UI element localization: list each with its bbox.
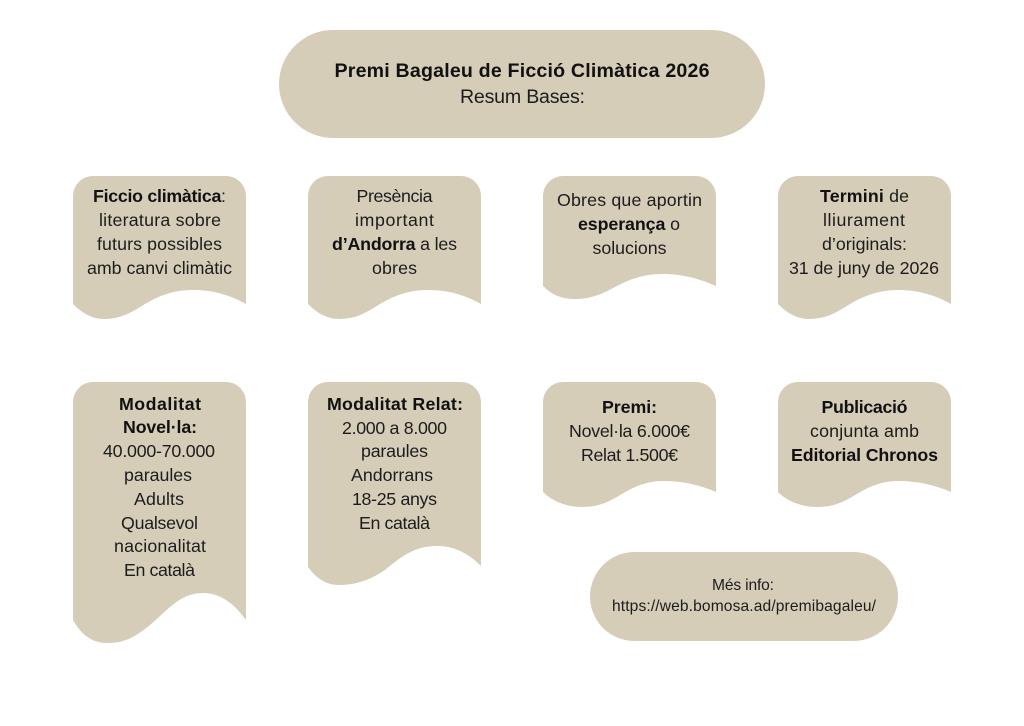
text: prize [569,397,690,465]
panel: publication [778,382,951,507]
text: novel category: Novel·la: [123,417,197,437]
text: more info [612,577,877,615]
text: publication: conjunta amb [810,421,919,441]
text: publication: Publicació [822,397,908,417]
text: short story category: Modalitat Relat: [327,394,463,414]
text: short story category [327,394,463,533]
panel: Andorra presence [308,176,481,319]
text: deadline: Termini de [820,186,909,206]
text: Andorra presence: important [355,210,434,230]
text: publication: Editorial Chronos [791,445,938,465]
panel: prize [543,382,716,507]
text: deadline: d’originals: [822,234,907,254]
text: Andorra presence: obres [372,258,417,278]
subtitle: Resum Bases: [460,86,585,108]
text: hope or solutions: esperança o [578,214,680,234]
text: novel category: nacionalitat [114,536,206,556]
text: deadline [789,186,939,278]
text: short story category: 2.000 a 8.000 [342,418,447,438]
panel: short story category [308,382,481,585]
text: climate fiction definition: amb canvi climàtic [87,258,232,278]
text: climate fiction definition: Ficcio climàtica: [93,186,226,206]
text: prize: Relat 1.500€ [581,445,678,465]
text: novel category: Adults [134,489,184,509]
title: Premi Bagaleu de Ficció Climàtica 2026 [334,60,710,82]
text: novel category: Modalitat [119,394,201,414]
text: novel category [103,394,215,580]
text: short story category: paraules [361,441,428,461]
text: deadline: 31 de juny de 2026 [789,258,939,278]
text: more info: https://web.bomosa.ad/premibagaleu/ [612,598,877,615]
text: novel category: En català [124,560,195,580]
text: Andorra presence [332,186,457,278]
panel: more info pill [590,552,898,641]
text: novel category: paraules [124,465,192,485]
text: climate fiction definition: futurs possibles [97,234,222,254]
text: novel category: 40.000-70.000 [103,441,215,461]
text: hope or solutions: solucions [592,238,667,258]
panel: title pill [279,30,765,138]
panel: novel category [73,382,246,643]
text: novel category: Qualsevol [121,513,198,533]
text: more info: Més info: [712,577,774,594]
text: hope or solutions [557,190,702,258]
text: prize: Novel·la 6.000€ [569,421,690,441]
text: Andorra presence: Presència [356,186,433,206]
text: climate fiction definition: literatura sobre [99,210,221,230]
text: climate fiction definition [87,186,232,278]
text: short story category: Andorrans [351,465,433,485]
text: publication [791,397,938,465]
text: hope or solutions: Obres que aportin [557,190,702,210]
panel: hope or solutions [543,176,716,299]
text: short story category: 18-25 anys [352,489,437,509]
text: prize: Premi: [602,397,657,417]
panel: climate fiction [73,176,246,319]
text: deadline: lliurament [823,210,905,230]
panel: deadline [778,176,951,319]
text: Andorra presence: d’Andorra a les [332,234,457,254]
text: short story category: En català [359,513,430,533]
